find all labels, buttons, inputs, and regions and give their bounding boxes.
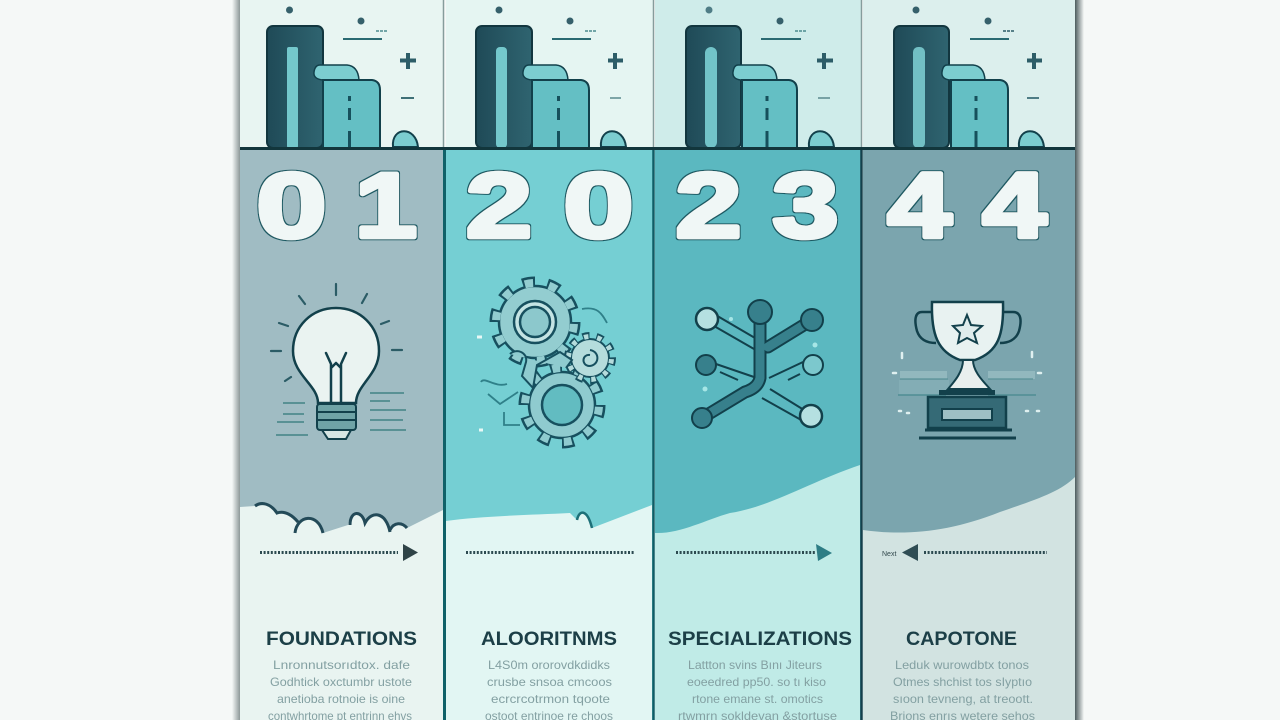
step number 01: [256, 155, 417, 257]
step number 20: 0: [564, 155, 634, 257]
text block: foundations: anetioba rotnoie is oine: [277, 692, 405, 706]
building icon: [476, 6, 626, 148]
text block: algorithms: crusbe snsoa cmcoos: [487, 675, 612, 689]
panel: foundations: [240, 0, 444, 720]
progress line: [466, 551, 635, 554]
icon: light bulb: [271, 284, 406, 439]
text block: algorithms: [485, 658, 613, 720]
text block: foundations: [268, 658, 412, 720]
panel: algorithms: [446, 0, 653, 720]
text block: capstone: Leduk wurowdbtx tonos: [895, 658, 1029, 672]
heading: specializations: SPECIALIZATIONS: [668, 628, 852, 650]
heading: foundations: FOUNDATIONS: [266, 628, 417, 650]
text block: foundations: Godhtick oxctumbr ustote: [270, 675, 412, 689]
panel: specializations: [655, 0, 861, 720]
text block: specializations: rtone emane st. omotics: [692, 692, 823, 706]
building icon: [686, 6, 834, 148]
step number 44: 4: [888, 155, 952, 257]
panel: capstone: [863, 0, 1075, 720]
text block: capstone: Otmes shchist tos sIyptıo: [893, 675, 1032, 689]
text block: capstone: [890, 658, 1035, 720]
icon: branching network: [692, 300, 823, 428]
progress arrow: [676, 544, 832, 561]
heading: algorithms: ALOORITNMS: [481, 628, 617, 650]
text block: specializations: [678, 658, 837, 720]
step number 23: [676, 155, 838, 257]
dome outline: [577, 513, 592, 528]
step number 20: 2: [466, 155, 532, 257]
progress arrow, reversed: [882, 544, 1047, 561]
icon: trophy: [893, 302, 1041, 438]
text block: specializations: Lattton svins Bını Jiteurs: [688, 658, 822, 672]
progress arrow: [260, 544, 418, 561]
step number 01: 1: [355, 155, 417, 257]
text block: specializations: eoeedred pp50. so tı kiso: [687, 675, 826, 689]
step number 44: [888, 155, 1046, 257]
text block: algorithms: ecrcrcotrmon tqoote: [491, 692, 610, 706]
progress arrow, reversed: Next: [882, 551, 896, 558]
step number 23: 2: [676, 155, 742, 257]
step number 44: 4: [982, 155, 1046, 257]
icon: gears: [477, 282, 612, 443]
text block: algorithms: L4S0m ororovdkdidks: [488, 658, 610, 672]
text block: capstone: sıoon tevneng, at treoott.: [893, 692, 1033, 706]
step number 23: 3: [772, 155, 838, 257]
building icon: [894, 6, 1044, 148]
step number 01: 0: [256, 155, 326, 257]
building icon: [267, 6, 418, 148]
step number 20: [466, 155, 634, 257]
heading: capstone: CAPOTONE: [906, 628, 1017, 650]
text block: foundations: Lnronnutsorıdtox. dafe: [273, 658, 410, 672]
cloud outlines: [255, 504, 407, 533]
